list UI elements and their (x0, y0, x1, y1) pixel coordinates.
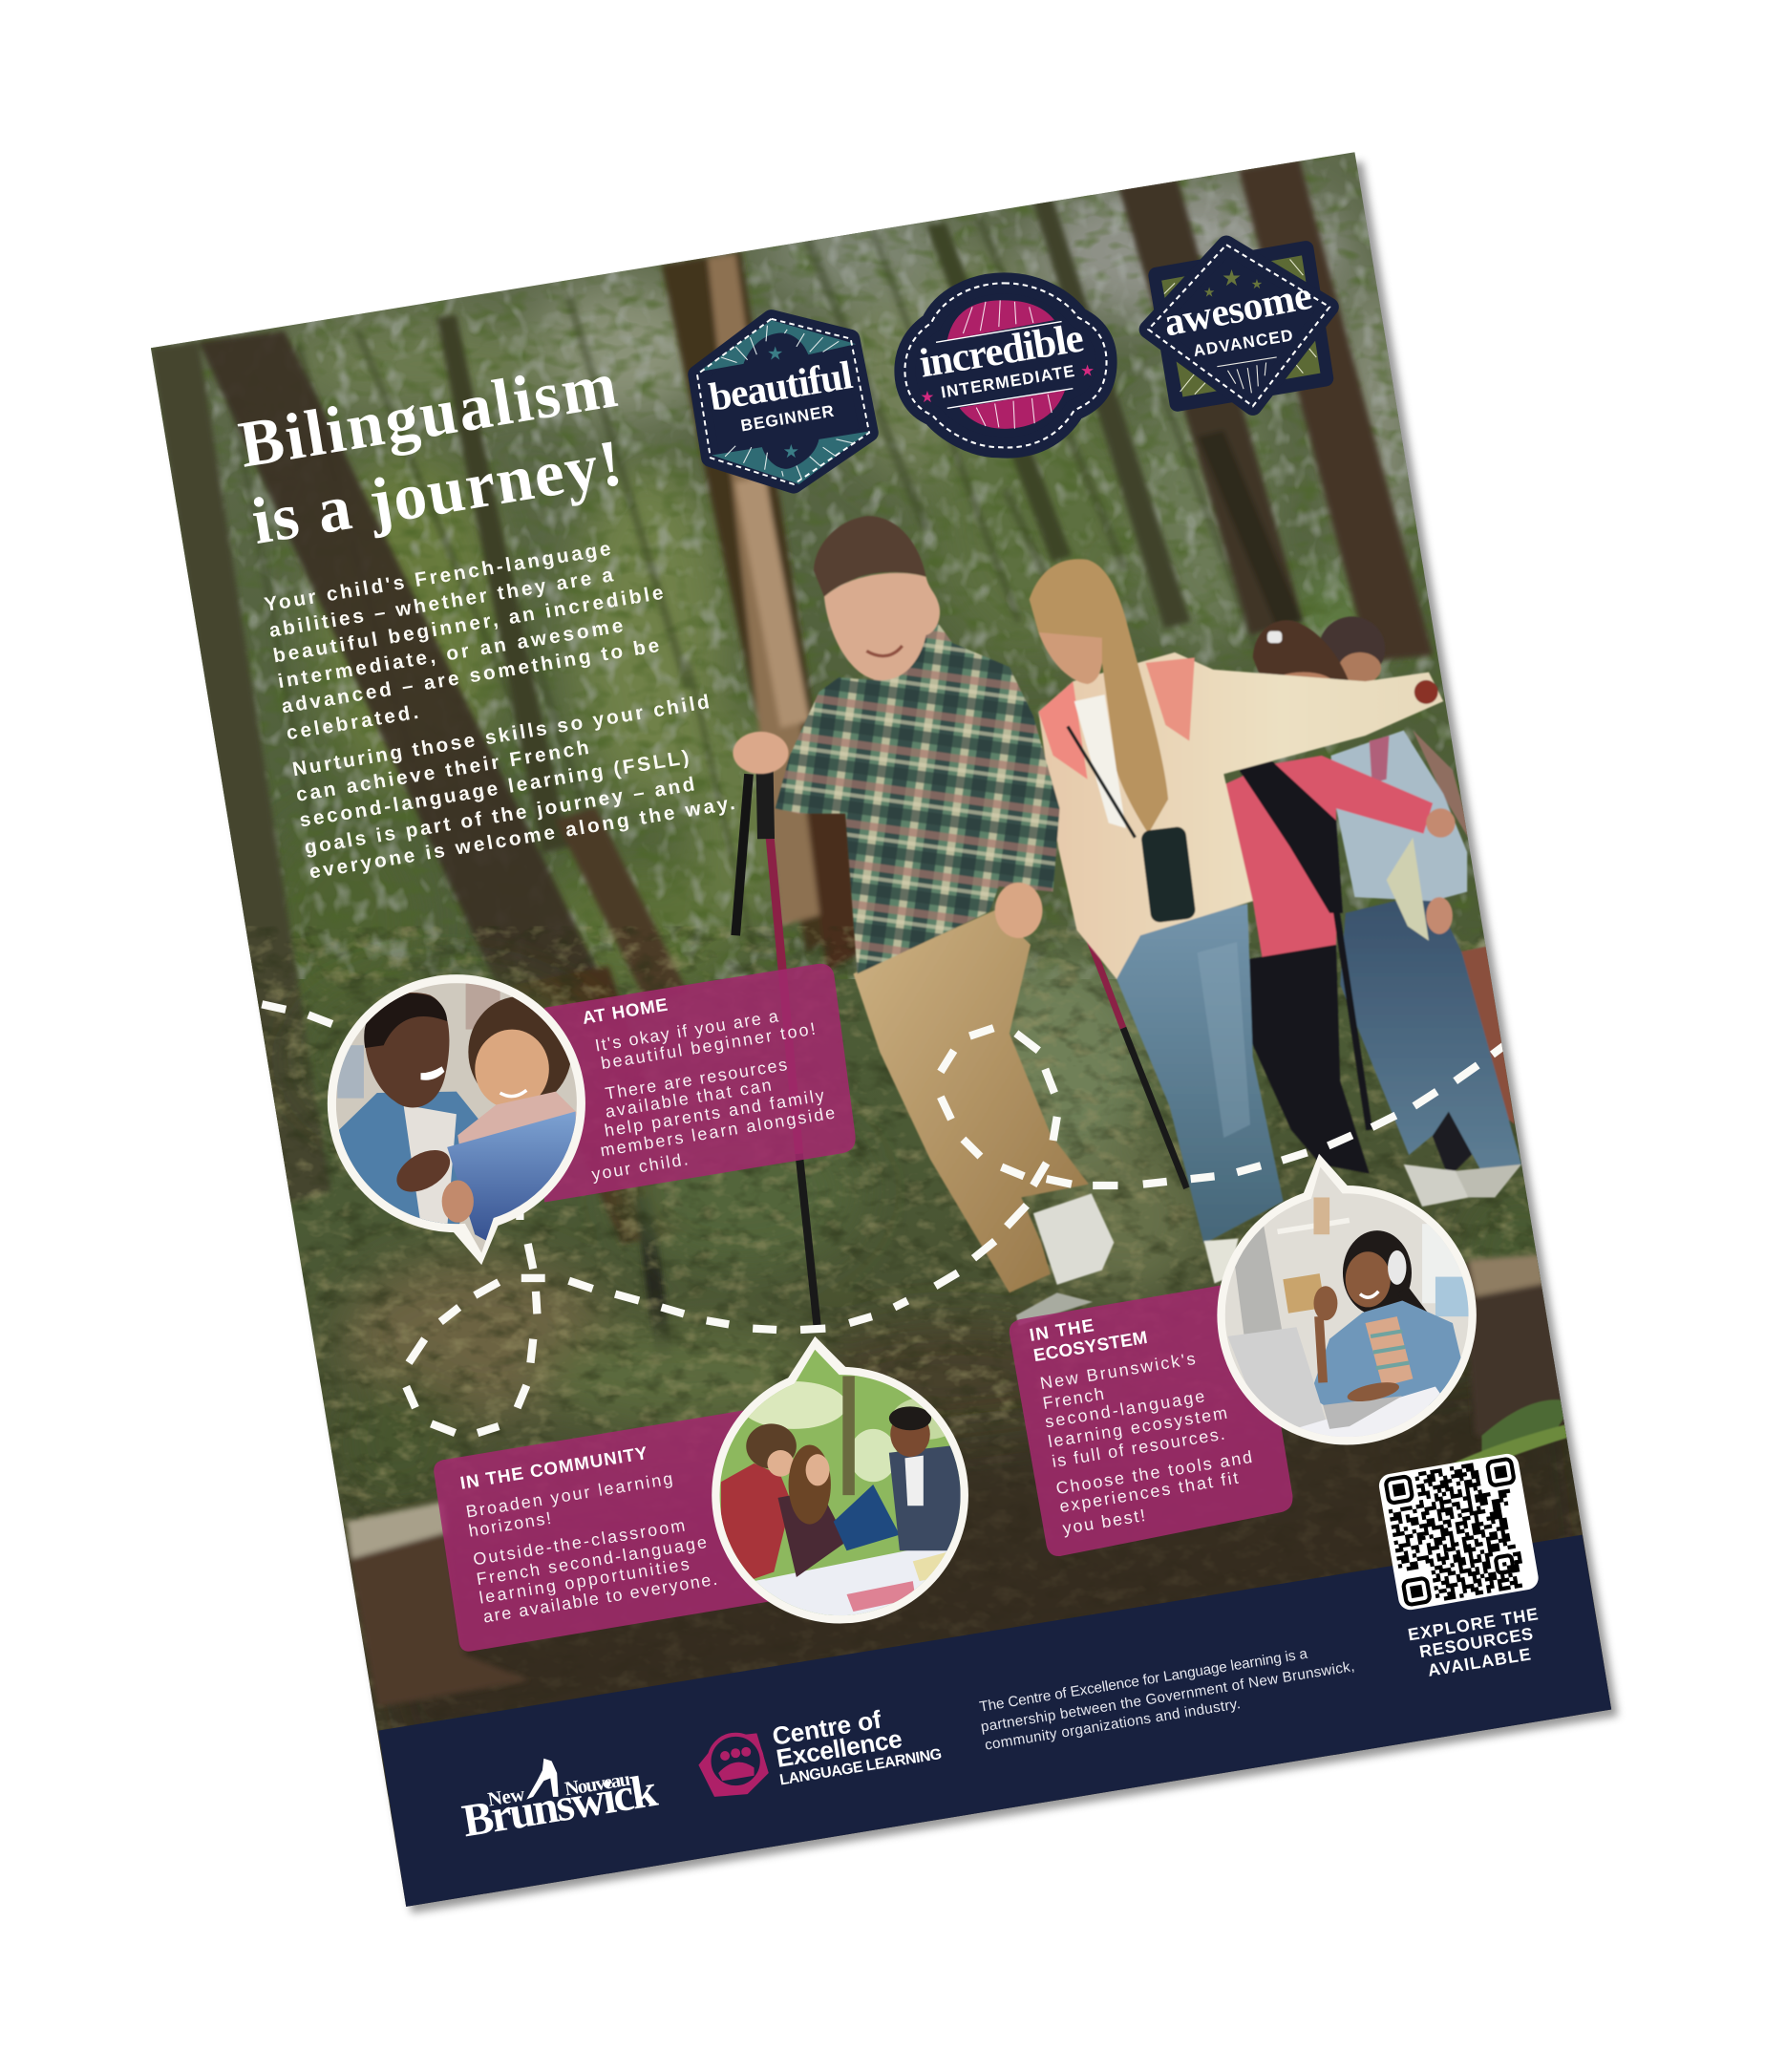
intro paragraph 1: celebrated. (285, 701, 420, 744)
intro paragraph 1: abilities – whether they are a (267, 564, 615, 642)
text: in the ecosystem body: learning ecosystem (1047, 1403, 1228, 1451)
QR caption: EXPLORE THE (1407, 1604, 1540, 1644)
magenta bottom cap (959, 391, 1065, 429)
badge: beautiful beginner: ★ (767, 343, 783, 365)
photo bubble: at home (324, 972, 588, 1271)
forest photo background (133, 133, 1627, 1932)
panel: in the community (436, 1408, 780, 1650)
footer partnership text: The Centre of Excellence for Language learning is a (978, 1646, 1309, 1716)
logo: Centre of Excellence (698, 1705, 943, 1797)
badge: beautiful beginner (697, 319, 869, 484)
intro paragraph 1: advanced – are something to be (280, 634, 661, 717)
canopy colour masses (265, 179, 1415, 1032)
forest floor colour masses (305, 952, 1587, 1508)
logo: Centre of Excellence: Excellence (775, 1724, 904, 1773)
magenta top cap (947, 300, 1054, 340)
badge: incredible intermediate: INTERMEDIATE (940, 361, 1075, 402)
intro paragraph 2 (291, 691, 736, 884)
logo: Centre of Excellence: Centre of (770, 1705, 883, 1751)
intro paragraph 1: Your child's French-language (263, 538, 612, 616)
child at far right (1319, 616, 1521, 1207)
heading: in the ecosystem: IN THE (1028, 1314, 1095, 1345)
QR caption: AVAILABLE (1426, 1644, 1532, 1680)
intro paragraph 2: goals is part of the journey – and (303, 773, 696, 859)
badge: awesome advanced: ★ (1222, 265, 1242, 291)
QR caption: RESOURCES (1418, 1624, 1534, 1661)
brown ground foreground (357, 1363, 1601, 1760)
badge: beautiful beginner: beautiful (706, 352, 856, 419)
intro paragraph 2: Nurturing those skills so your child (291, 691, 711, 780)
footer partnership text: community organizations and industry. (984, 1696, 1242, 1754)
intro paragraph 2: second-language learning (FSLL) (298, 746, 691, 832)
badge: awesome advanced: ADVANCED (1192, 325, 1294, 360)
heading: in the community: IN THE COMMUNITY (458, 1442, 649, 1493)
poster drop shadow (159, 161, 1618, 1913)
photo bubble: in the ecosystem (1217, 1154, 1481, 1468)
fallen logs (347, 1254, 1567, 1707)
walking poles (735, 770, 1187, 1330)
text: at home body (590, 1006, 837, 1184)
badge: incredible intermediate: ★ (921, 388, 934, 406)
text: in the ecosystem body: you best! (1061, 1506, 1146, 1538)
text: in the community body: horizons! (467, 1508, 553, 1541)
text: at home body: beautiful beginner too! (600, 1019, 817, 1073)
green plants lower right (1452, 1399, 1566, 1463)
text: in the ecosystem body: Choose the tools and (1054, 1447, 1253, 1498)
badge: incredible intermediate: ★ (1080, 361, 1095, 379)
forest floor leaf texture (252, 927, 1602, 1846)
badge: awesome advanced: ★ (1251, 277, 1263, 292)
badge: beautiful beginner: BEGINNER (739, 401, 836, 435)
boy in plaid shirt (733, 516, 1114, 1326)
QR code (1377, 1452, 1541, 1612)
tree trunks (151, 159, 1433, 1376)
badge: awesome advanced: ★ (1203, 285, 1215, 300)
infographic poster (151, 152, 1622, 1918)
canopy leaf dapples (151, 157, 1486, 963)
photo bubble: in the community (708, 1336, 972, 1628)
panel: in the ecosystem (1010, 1281, 1291, 1555)
text: at home body: members learn alongside (599, 1103, 837, 1160)
thin background stems (231, 219, 1257, 952)
text: in the ecosystem body: second-language (1044, 1386, 1206, 1431)
intro paragraph 1 (263, 538, 665, 744)
logo: New Brunswick: Brunswick (458, 1765, 661, 1847)
panel: at home (545, 965, 855, 1202)
dashed journey path (262, 1004, 1508, 1433)
badge: incredible intermediate (904, 283, 1107, 447)
text: in the community body: French second-language (475, 1532, 708, 1589)
logo: Centre of Excellence: LANGUAGE LEARNING (778, 1746, 943, 1788)
girl with peach jacket (1030, 559, 1443, 1284)
text: at home body: It's okay if you are a (594, 1006, 780, 1056)
title: Bilingualism (234, 347, 622, 481)
text: at home body: available that can (604, 1076, 773, 1121)
intro paragraph 1: beautiful beginner, an incredible (271, 582, 665, 667)
icon: bird (526, 1759, 559, 1800)
child in coral jacket (1223, 620, 1456, 1174)
text: in the community body: learning opportunities (478, 1554, 691, 1608)
heading: at home: AT HOME (581, 994, 669, 1028)
logo: New Brunswick: New (486, 1784, 526, 1811)
badge: incredible intermediate: incredible (916, 315, 1087, 387)
intro paragraph 1: intermediate, or an awesome (276, 614, 625, 693)
text: in the community body: Broaden your learning (464, 1469, 674, 1522)
QR caption (1407, 1604, 1540, 1680)
icon: magenta hexagon with people (698, 1733, 769, 1797)
text: at home body: There are resources (604, 1055, 788, 1103)
text: in the community body: Outside-the-classroom (472, 1515, 687, 1569)
forest floor light leaves (245, 927, 1595, 1870)
text: at home body: help parents and family (603, 1085, 825, 1141)
badge: awesome advanced: awesome (1160, 273, 1315, 345)
intro paragraph 2: can achieve their French (294, 737, 590, 806)
badge: beautiful beginner: ★ (783, 440, 799, 462)
text: in the community body (464, 1469, 718, 1627)
footer band (378, 1535, 1611, 1907)
text: in the ecosystem body: New Brunswick's (1039, 1349, 1197, 1393)
teal top band (698, 320, 856, 372)
text: in the ecosystem body: experiences that fit (1058, 1468, 1240, 1516)
text: in the ecosystem body: French (1041, 1384, 1105, 1413)
text: in the community body: are available to everyone. (481, 1570, 718, 1627)
text: at home body: your child. (590, 1149, 690, 1184)
teal bottom band (712, 432, 869, 484)
canopy light dapples (170, 153, 1486, 979)
logo: New Brunswick: Nouveau (563, 1768, 632, 1800)
title (234, 347, 627, 558)
text: in the ecosystem body (1039, 1349, 1253, 1538)
intro paragraph 2: everyone is welcome along the way. (308, 792, 736, 884)
text: in the ecosystem body: is full of resources. (1051, 1424, 1226, 1471)
children group (733, 516, 1521, 1326)
badge: awesome advanced (1148, 245, 1329, 406)
footer partnership text: partnership between the Government of New Brunswick, (980, 1658, 1355, 1736)
title: is a journey! (246, 425, 627, 558)
heading: in the ecosystem: ECOSYSTEM (1031, 1327, 1149, 1365)
